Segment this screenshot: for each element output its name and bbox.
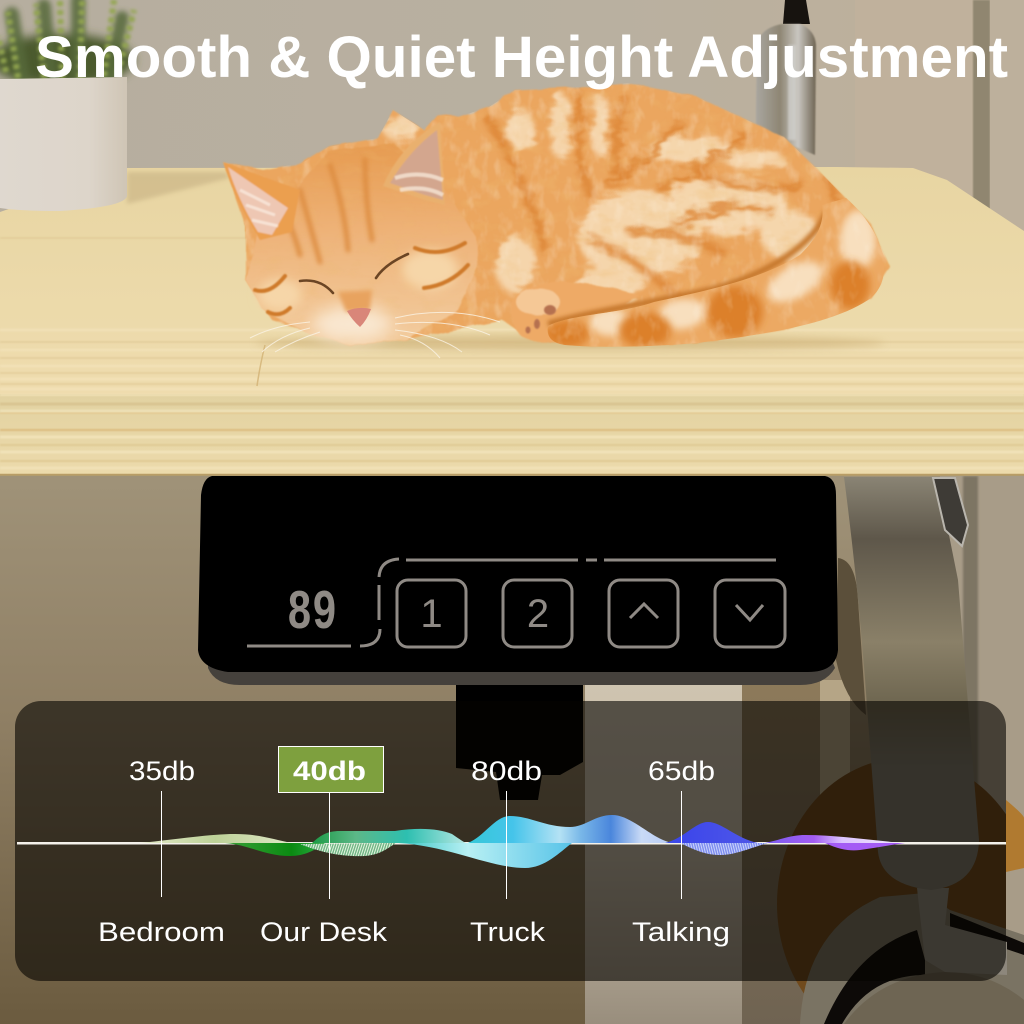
headphone black arc right [950, 913, 1024, 955]
bedroom wave low [225, 843, 325, 856]
right wall dark strip [963, 476, 978, 836]
label truck: Truck [470, 917, 546, 947]
label talking: Talking [632, 917, 730, 947]
dark stripes [490, 95, 843, 300]
button 2 [503, 580, 572, 647]
cheek light [402, 250, 458, 290]
body fur pattern [220, 80, 900, 350]
wall right strip [990, 0, 1024, 235]
cheek stripes [255, 243, 468, 314]
height display: 89 [287, 581, 337, 645]
blue wave top [665, 822, 758, 843]
muzzle [312, 306, 392, 342]
orange sleeping cat [220, 80, 900, 358]
plant foliage [0, 0, 134, 86]
bedroom wave top [140, 834, 292, 843]
button 2: 2 [527, 592, 549, 636]
under-desk wall [0, 470, 1024, 1024]
controller underside [208, 655, 835, 685]
metal hinge [933, 478, 968, 546]
wall column [855, 0, 973, 230]
panel background [15, 701, 1006, 981]
label 65db: 65db [648, 756, 715, 786]
whiskers [250, 312, 500, 358]
touch outline [247, 559, 776, 646]
front edge grain [0, 395, 1024, 468]
cat head [246, 143, 478, 345]
tail orange bands [545, 261, 870, 348]
tail shadow line [548, 212, 826, 324]
cat body [223, 83, 890, 345]
height controller [198, 476, 838, 800]
front edge bottom line [0, 474, 1024, 476]
cat shadow [255, 335, 885, 351]
blue wave low [680, 843, 768, 855]
dark fur texture [388, 96, 806, 282]
button 1: 1 [420, 592, 443, 636]
nose [347, 308, 371, 327]
cyan blue wave top [468, 815, 672, 843]
face markings [245, 140, 500, 358]
wall corner shadow [973, 0, 990, 210]
headphone band [800, 893, 1024, 1024]
front paw [511, 282, 640, 342]
nose bridge [338, 290, 372, 312]
desk [0, 167, 1024, 476]
right ear [383, 122, 445, 205]
button 1 [397, 580, 466, 647]
purple wave top [765, 835, 902, 843]
side bracket [836, 558, 866, 715]
wall [0, 0, 1024, 240]
button down [715, 580, 785, 647]
label 80db: 80db [471, 756, 542, 786]
label 35db: 35db [129, 756, 195, 786]
headphone ear pad [777, 763, 1006, 994]
wood grain light [0, 330, 1024, 389]
tail [548, 198, 884, 347]
controller mount [456, 685, 583, 800]
tail fur texture [548, 200, 884, 346]
desk wave top [312, 829, 466, 843]
headphone stem [917, 888, 1007, 975]
highlighted 40db badge: 40db [293, 756, 366, 786]
plant shadow on desk [127, 172, 230, 204]
headphone orange rim [1006, 800, 1024, 872]
bottle [756, 0, 816, 155]
headphone black arc [824, 930, 925, 1024]
desktop surface [0, 167, 1024, 396]
left ear [223, 162, 300, 240]
white post [585, 680, 742, 1024]
tan gap beside post [820, 680, 850, 800]
label bedroom: Bedroom [98, 917, 225, 947]
tail cream bands [590, 210, 876, 336]
post side shade [742, 680, 824, 1024]
desk front edge [0, 394, 1024, 475]
desk shadow on wall [0, 468, 1024, 476]
forehead stripes [285, 160, 372, 262]
highlighted 40db badge [278, 746, 384, 792]
steel arm [844, 477, 979, 890]
title: Smooth & Quiet Height Adjustment [35, 25, 1008, 90]
left cheek light [258, 279, 302, 311]
teal wave low [398, 843, 572, 868]
photo background: room [0, 0, 1024, 240]
marker lines [162, 791, 682, 899]
under-desk area [0, 470, 1024, 1024]
button up [609, 580, 678, 647]
label our desk: Our Desk [260, 917, 388, 947]
noise comparison panel [15, 701, 1006, 981]
wood grain dark [0, 238, 1024, 384]
desk wave low [300, 843, 396, 856]
purple wave low [825, 843, 905, 850]
light fur texture [220, 80, 900, 350]
sound wave [17, 815, 1006, 868]
cream patches [382, 91, 820, 305]
plant pot [0, 77, 127, 211]
closed eyes [300, 254, 408, 293]
controller body [198, 476, 838, 672]
head fur texture [425, 324, 430, 326]
potted plant [0, 0, 230, 211]
wave baseline [17, 842, 1006, 844]
tail base [548, 198, 884, 347]
paw pads [526, 305, 556, 334]
right wall [940, 476, 1024, 1024]
crack in wood [257, 345, 265, 386]
headphone cup [844, 972, 1024, 1024]
